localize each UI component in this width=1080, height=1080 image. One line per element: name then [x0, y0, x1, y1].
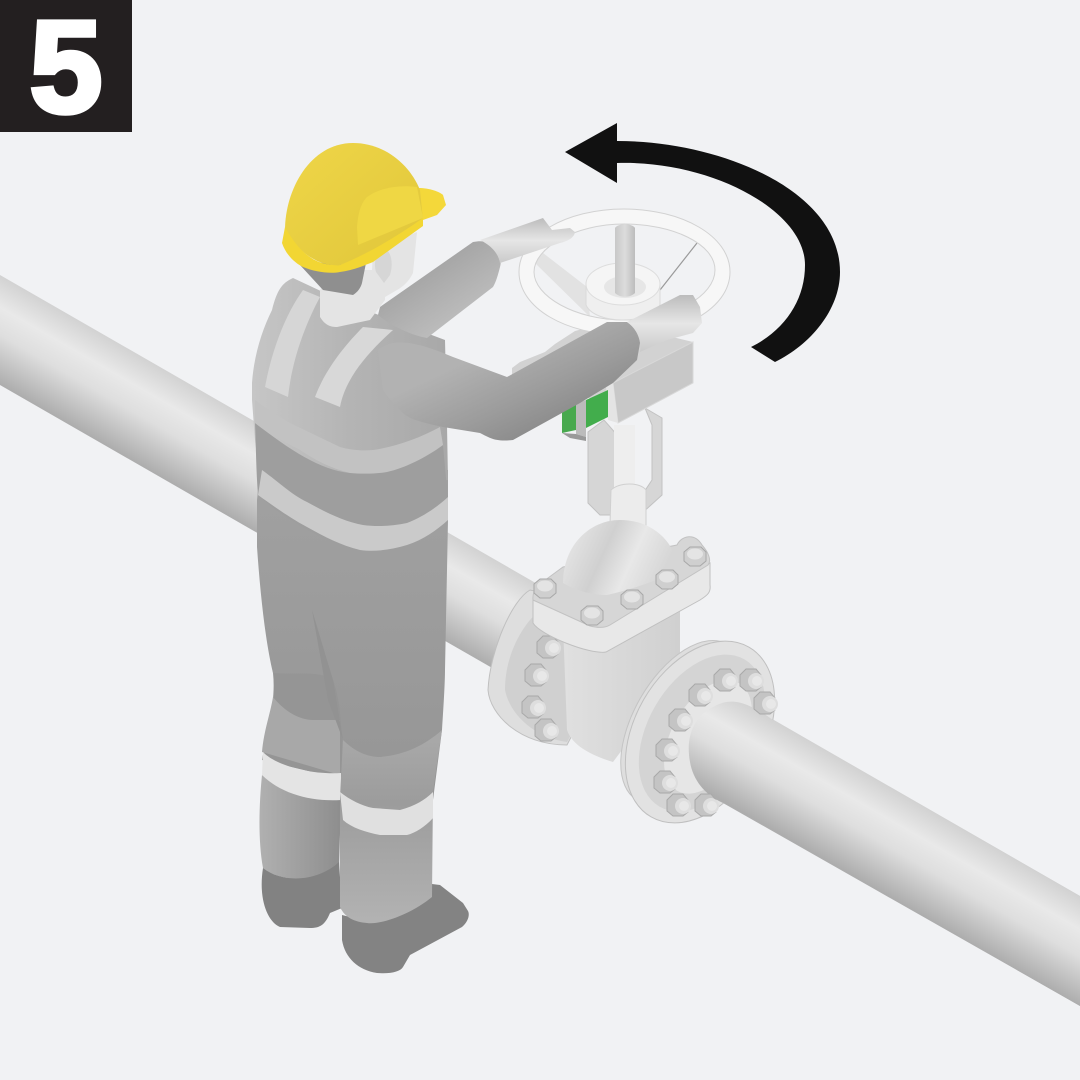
wheel hub [586, 263, 660, 320]
rear boot [262, 862, 342, 928]
wheel rim [519, 209, 730, 335]
hat peak [418, 188, 446, 220]
head and face [300, 232, 417, 300]
rear thigh [262, 640, 345, 780]
neck [320, 270, 385, 327]
front shin [340, 730, 442, 923]
wheel stem [615, 224, 635, 297]
hat highlight [357, 186, 423, 245]
left flange [488, 590, 590, 745]
vest vertical reflective stripes [265, 290, 393, 407]
pipe outlet hub [689, 702, 1080, 1006]
gearbox side strip [606, 383, 618, 423]
front leg reflective band [340, 792, 433, 835]
rear shin [260, 775, 341, 879]
rear leg reflective band [262, 752, 341, 800]
yoke and stem [588, 408, 662, 531]
right flange bolts [654, 669, 778, 816]
jacket upper torso [252, 278, 448, 480]
front boot [342, 884, 469, 973]
hat dome [285, 143, 423, 265]
waist reflective band [258, 470, 448, 551]
gate valve [488, 408, 1080, 1006]
gearbox front face [613, 342, 693, 423]
hat brim [282, 218, 423, 273]
right flange [595, 615, 805, 849]
valve body [563, 610, 680, 762]
arrow: counter-clockwise rotation [565, 123, 840, 362]
hard hat [282, 143, 446, 273]
wheel spoke [535, 253, 590, 317]
far arm [378, 241, 501, 338]
near glove [627, 295, 702, 352]
bonnet flange plate [533, 537, 710, 652]
step number badge [0, 0, 132, 140]
pipe behind the valve [0, 275, 1080, 1006]
near arm [378, 322, 640, 441]
leg split shadow [312, 610, 343, 740]
worker [252, 143, 702, 973]
jacket lower shade [255, 423, 448, 550]
rear knee [262, 697, 340, 775]
handwheel actuator [512, 209, 730, 441]
far glove [480, 218, 575, 263]
green indicator panels [562, 390, 608, 441]
gearbox top and rear housing [512, 322, 693, 400]
wheel thin spoke [660, 243, 697, 290]
vest horizontal reflective band [255, 400, 443, 474]
bonnet bolts [534, 547, 706, 625]
torso lower and thigh [257, 470, 448, 800]
bonnet dome [563, 520, 677, 595]
